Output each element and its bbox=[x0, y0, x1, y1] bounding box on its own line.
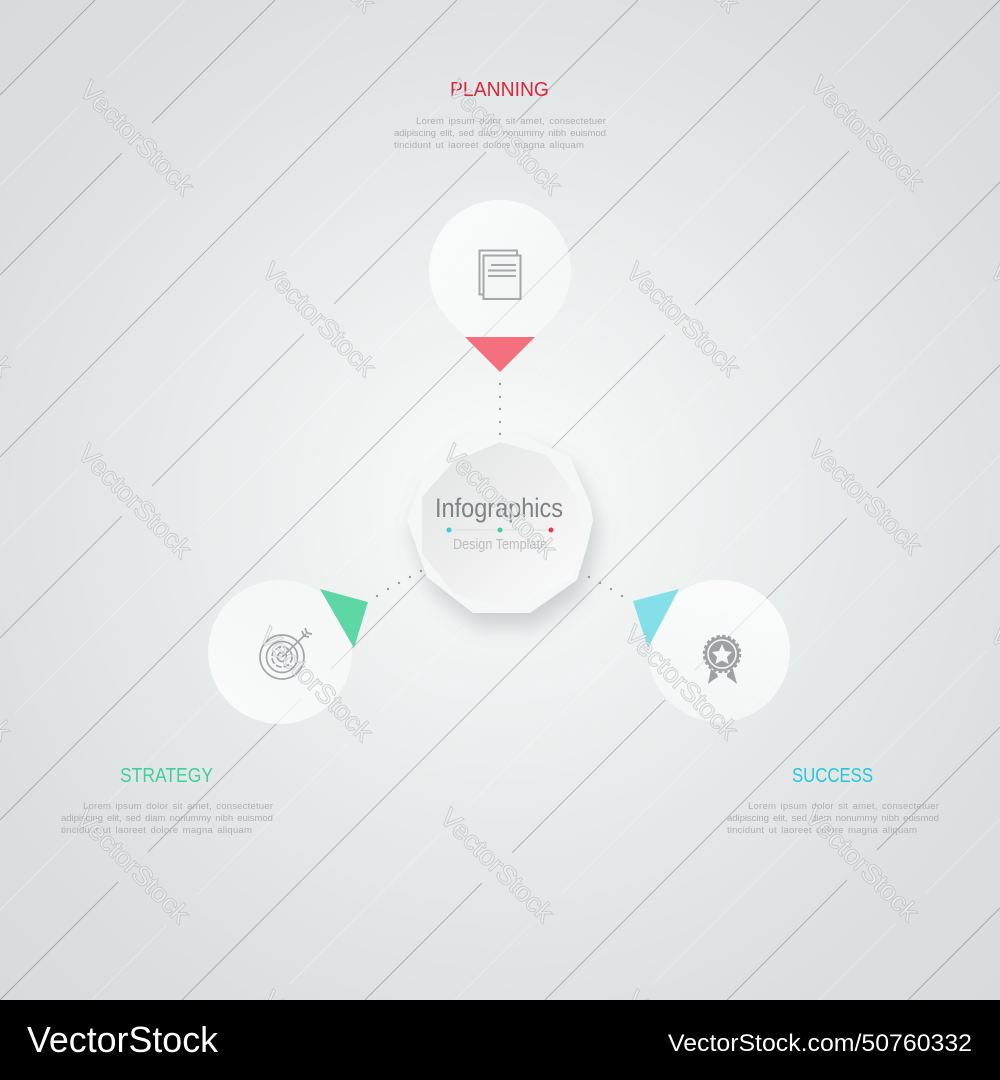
text block: planning: tincidunt ut laoreet dolore magna aliquam bbox=[394, 140, 584, 151]
watermarks: VectorStock bbox=[253, 621, 380, 748]
text block: success: Lorem ipsum dolor sit amet, consectetuer bbox=[748, 801, 940, 812]
disc: success bbox=[648, 580, 790, 722]
watermarks: VectorStock bbox=[72, 438, 199, 565]
icon: documents bbox=[480, 250, 520, 299]
icon: target with arrow bbox=[260, 628, 312, 679]
dotted connector: top bbox=[499, 383, 501, 435]
text block: success: adipiscing elit, sed diam nonummy nibh euismod bbox=[727, 813, 939, 824]
watermarks: V bbox=[256, 984, 290, 1018]
watermarks: VectorStock bbox=[437, 438, 564, 565]
text block: strategy: tincidunt ut laoreet dolore magna aliquam bbox=[61, 825, 252, 836]
heading: planning: PLANNING bbox=[450, 79, 549, 101]
badge: inner faceted shape bbox=[422, 442, 585, 607]
watermarks: VectorStock bbox=[70, 803, 197, 930]
text block: planning bbox=[394, 116, 607, 151]
pointer: blue triangle bbox=[633, 589, 679, 648]
text block: strategy: Lorem ipsum dolor sit amet, consectetuer bbox=[83, 801, 274, 812]
watermarks: VectorStock bbox=[804, 70, 931, 197]
disc: planning bbox=[429, 200, 571, 337]
watermarks: VectorStock bbox=[802, 434, 929, 561]
footer band bbox=[0, 1000, 1000, 1080]
dotted connector: left bbox=[376, 570, 422, 597]
panel: success node bbox=[633, 580, 790, 722]
pointer: green triangle bbox=[320, 589, 368, 648]
watermarks: VectorStock bbox=[434, 802, 561, 929]
watermarks: VectorStock bbox=[256, 256, 383, 383]
heading: success: SUCCESS bbox=[792, 765, 873, 787]
center subtitle: Design Template bbox=[453, 536, 547, 553]
text block: strategy bbox=[61, 801, 274, 836]
heading: strategy: STRATEGY bbox=[120, 765, 213, 787]
watermarks: VectorStock bbox=[442, 74, 569, 201]
text block: planning: Lorem ipsum dolor sit amet, consectetuer bbox=[416, 116, 607, 127]
watermarks: VectorStock bbox=[799, 801, 926, 928]
panel: center badge bbox=[407, 435, 593, 613]
dotted connector: right bbox=[578, 570, 623, 597]
center divider with colored dots bbox=[446, 528, 554, 532]
text block: success bbox=[727, 801, 940, 836]
watermarks: VectorStock bbox=[618, 619, 745, 746]
footer logo text: VectorStock bbox=[27, 1019, 219, 1060]
icon: award medal bbox=[704, 636, 740, 684]
text block: success: tincidunt ut laoreet dolore magna aliquam bbox=[727, 825, 917, 836]
pointer: red triangle bbox=[465, 337, 535, 372]
disc: strategy bbox=[208, 580, 352, 724]
watermarks: VectorStock bbox=[74, 75, 201, 202]
watermarks: VectorStock bbox=[620, 256, 747, 383]
center title: Infographics bbox=[435, 493, 563, 523]
text block: strategy: adipiscing elit, sed diam nonummy nibh euismod bbox=[61, 813, 273, 824]
panel: planning node bbox=[429, 200, 571, 372]
badge: outer faceted shape bbox=[407, 435, 593, 613]
footer image id: VectorStock.com/50760332 bbox=[668, 1030, 972, 1057]
text block: planning: adipiscing elit, sed diam nonummy nibh euismod bbox=[394, 128, 606, 139]
panel: strategy node bbox=[208, 580, 368, 724]
watermarks: V bbox=[620, 984, 654, 1018]
